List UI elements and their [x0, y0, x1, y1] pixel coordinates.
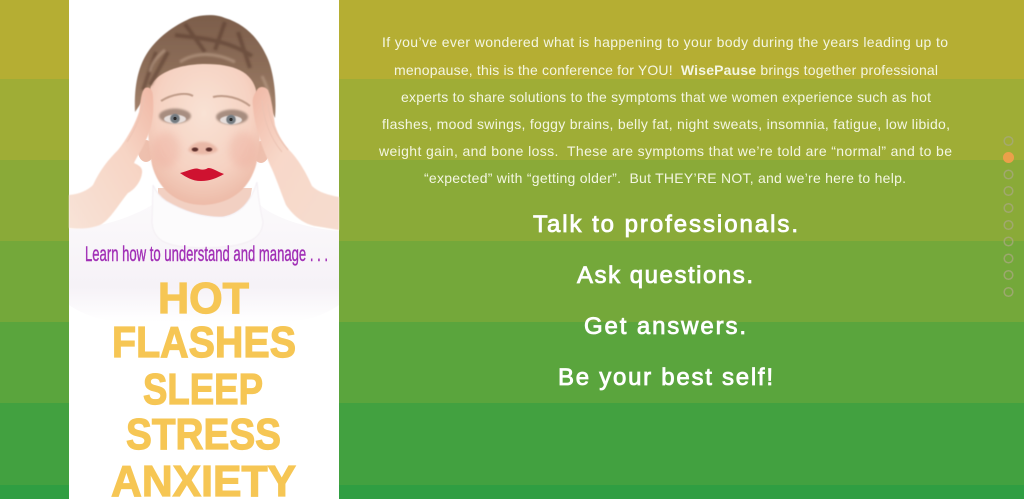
- panel: poster: [69, 0, 339, 499]
- face: [148, 64, 260, 205]
- cheek blush: [152, 132, 180, 168]
- turtleneck collar: [152, 182, 263, 248]
- right eye: [216, 110, 248, 124]
- shirt: [69, 205, 339, 322]
- symptom list: [111, 274, 296, 499]
- symptom list: STRESS: [126, 410, 281, 459]
- call to action lines: Get answers.: [584, 313, 746, 340]
- photo: stressed woman: [69, 15, 339, 322]
- slide navigation dots: [1004, 137, 1013, 296]
- ears: [138, 140, 154, 162]
- right arm and hand: [253, 87, 339, 230]
- hair highlights: [150, 50, 270, 100]
- intro paragraph: experts to share solutions to the symptoms that we women experience such as hot: [401, 89, 931, 105]
- left eye: [159, 108, 191, 124]
- eyebrows: [161, 94, 250, 106]
- neck: [158, 188, 252, 217]
- symptom list: FLASHES: [112, 318, 296, 367]
- intro paragraph: If you’ve ever wondered what is happening to your body during the years leading up to: [382, 34, 948, 50]
- lips: [180, 168, 224, 181]
- symptom list: HOT: [158, 274, 249, 323]
- left arm and hand: [69, 87, 153, 229]
- intro paragraph: menopause, this is the conference for YOU! WisePause brings together professional: [394, 62, 938, 78]
- call to action lines: Be your best self!: [558, 364, 773, 391]
- symptom list: SLEEP: [143, 365, 263, 414]
- intro paragraph: “expected” with “getting older”. But THEY’RE NOT, and we’re here to help.: [424, 170, 906, 186]
- subheading: Learn how to understand and manage . . .: [85, 243, 328, 266]
- intro paragraph: [378, 34, 952, 186]
- call to action lines: Ask questions.: [577, 262, 753, 289]
- nose: [188, 142, 218, 154]
- call to action lines: Talk to professionals.: [533, 211, 798, 238]
- intro paragraph: weight gain, and bone loss. These are symptoms that we’re told are “normal” and to be: [378, 143, 952, 159]
- hair texture: [143, 22, 252, 90]
- hair back: [135, 15, 276, 118]
- call to action lines: [533, 211, 798, 391]
- finger lines: [127, 97, 288, 152]
- intro paragraph: flashes, mood swings, foggy brains, belly fat, night sweats, insomnia, fatigue, low libido,: [382, 116, 950, 132]
